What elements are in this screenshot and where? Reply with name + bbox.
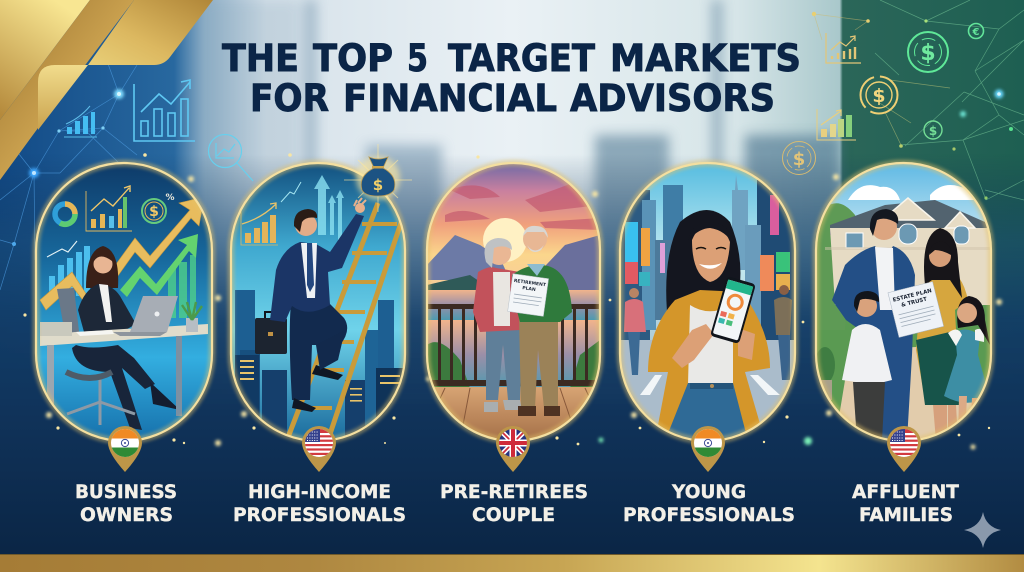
panel: young professionals xyxy=(620,163,795,441)
pin: India xyxy=(108,426,142,472)
icon: money bag xyxy=(344,144,412,212)
boy xyxy=(842,324,892,382)
pin: USA 2 xyxy=(887,426,921,472)
pin: UK xyxy=(496,426,530,472)
icon: green dollar coin xyxy=(908,32,948,72)
icon: dollar circle xyxy=(142,193,175,223)
bottom gold bar xyxy=(0,554,1024,572)
man xyxy=(290,304,348,400)
city buildings xyxy=(621,176,794,340)
chair back xyxy=(57,288,79,332)
title: TARGET xyxy=(448,37,596,80)
chair base xyxy=(66,372,135,425)
woman xyxy=(486,328,522,400)
icon: money bag: $ xyxy=(373,176,383,194)
icon: dollar circle: $ xyxy=(149,204,159,220)
pin: USA xyxy=(302,426,336,472)
label: business owners xyxy=(75,481,177,526)
background people xyxy=(624,285,792,380)
icon: euro coin xyxy=(968,24,984,38)
arch frame xyxy=(816,163,991,441)
briefcase xyxy=(255,312,287,354)
icon: gold dollar coin xyxy=(860,76,898,114)
label: pre-retirees couple: PRE-RETIREES xyxy=(440,481,588,503)
label: high-income professionals xyxy=(233,481,406,526)
icon: gold outline coin: $ xyxy=(793,149,805,170)
label: young professionals xyxy=(623,481,795,526)
man xyxy=(832,246,915,441)
cardigan xyxy=(648,290,770,441)
arms xyxy=(672,324,714,368)
skyline xyxy=(235,290,406,445)
icon: four-point star xyxy=(964,512,1001,548)
clouds xyxy=(848,185,985,200)
phone xyxy=(711,280,755,343)
railing xyxy=(427,304,600,386)
title: TOP xyxy=(313,37,393,80)
estate plan document: & TRUST xyxy=(901,297,928,309)
retirement plan document: PLAN xyxy=(522,285,536,293)
woman hair xyxy=(86,246,118,288)
title: ADVISORS xyxy=(570,77,775,120)
panel: high-income professionals xyxy=(231,144,412,445)
label: affluent families xyxy=(852,481,959,526)
ladder xyxy=(287,202,408,440)
title: FOR xyxy=(250,77,329,120)
girl xyxy=(944,329,989,403)
panel: affluent families xyxy=(815,163,991,441)
icon: small bar chart xyxy=(64,106,97,137)
icon: magnifier chart xyxy=(208,134,253,181)
icon: up arrows xyxy=(314,175,344,240)
desk xyxy=(40,324,208,346)
icon: green gold chart xyxy=(817,109,856,140)
label: pre-retirees couple: COUPLE xyxy=(472,504,555,526)
icon: donut chart xyxy=(55,204,75,224)
legs xyxy=(72,345,155,430)
woman hair xyxy=(666,210,740,310)
tree xyxy=(816,203,858,330)
icon: gold bars xyxy=(241,203,278,245)
title: 5 xyxy=(407,37,428,80)
man xyxy=(519,318,558,408)
icon: gold dollar coin: $ xyxy=(872,85,886,107)
label: business owners: BUSINESS xyxy=(75,481,177,503)
pin: India 2 xyxy=(691,426,725,472)
plant xyxy=(182,302,202,332)
label: pre-retirees couple xyxy=(440,481,588,526)
title: FINANCIAL xyxy=(343,77,557,120)
woman xyxy=(916,268,968,405)
face xyxy=(692,224,730,282)
icon: large line chart xyxy=(134,80,195,141)
green arrow xyxy=(120,234,198,297)
icon: gold bar chart xyxy=(86,186,132,231)
label: young professionals: YOUNG xyxy=(671,481,746,503)
estate plan document: ESTATE PLAN xyxy=(892,288,933,304)
panel: pre-retirees couple xyxy=(420,163,610,442)
network and chart icons left xyxy=(0,50,253,290)
jeans xyxy=(669,383,746,438)
laptop xyxy=(130,296,178,332)
house xyxy=(825,198,990,305)
title: MARKETS xyxy=(610,37,801,80)
icon: gold outline coin xyxy=(782,142,816,174)
icon: small green coin xyxy=(924,121,942,139)
arch frame xyxy=(231,163,405,441)
network and coin icons right xyxy=(782,0,1024,200)
icon: small green coin: $ xyxy=(929,124,937,138)
arch frame xyxy=(620,163,795,441)
label: business owners: OWNERS xyxy=(80,504,173,526)
label: affluent families: AFFLUENT xyxy=(852,481,959,503)
panel: business owners xyxy=(36,163,212,441)
label: high-income professionals: HIGH-INCOME xyxy=(248,481,391,503)
estate plan document xyxy=(888,282,944,337)
retirement plan document xyxy=(508,274,549,316)
small bars xyxy=(49,246,90,296)
gold corner ribbons xyxy=(0,0,213,180)
tee xyxy=(688,304,733,385)
retirement plan document: RETIREMENT xyxy=(513,278,547,288)
gold arrow xyxy=(40,197,204,312)
title: THE xyxy=(222,37,299,80)
icon: green dollar coin: $ xyxy=(920,41,936,66)
woman torso xyxy=(78,284,136,332)
label: young professionals: PROFESSIONALS xyxy=(623,504,795,526)
icon: dollar circle: % xyxy=(165,193,175,203)
sparkles xyxy=(23,153,1002,449)
green sparkle xyxy=(599,437,812,445)
icon: top gold chart xyxy=(826,33,861,63)
icon: euro coin: € xyxy=(972,27,980,38)
title xyxy=(222,37,801,120)
arch frame xyxy=(427,163,600,441)
label: affluent families: FAMILIES xyxy=(859,504,953,526)
lawn xyxy=(816,300,991,441)
arch frame xyxy=(36,163,212,441)
street xyxy=(621,340,794,424)
label: high-income professionals: PROFESSIONALS xyxy=(233,504,406,526)
